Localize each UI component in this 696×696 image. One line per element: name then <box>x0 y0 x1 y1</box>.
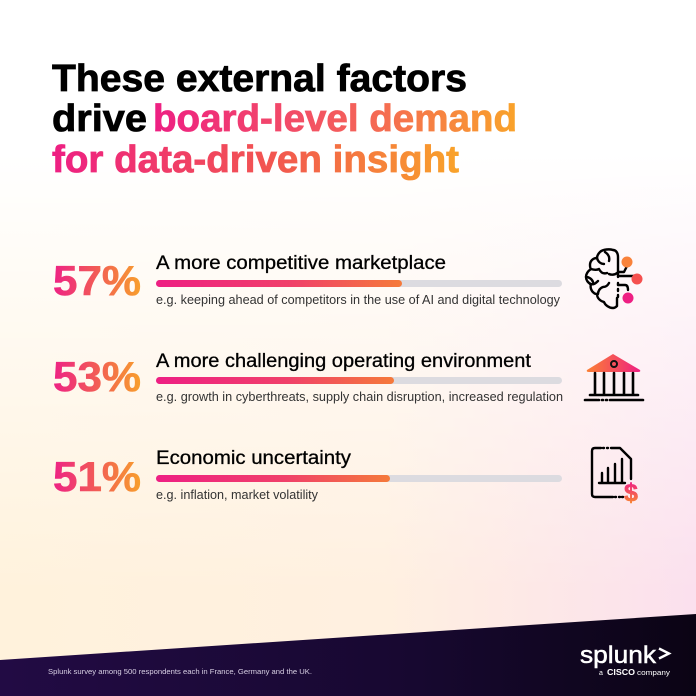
stat 51%: 51% <box>53 453 141 500</box>
icon: bank building <box>585 354 643 400</box>
icon nodes <box>622 256 642 304</box>
heading: A more challenging operating environment <box>156 351 532 372</box>
row: challenging operating environment <box>53 351 643 404</box>
progress bar 51% <box>156 475 562 482</box>
logo: splunk a cisco company: CISCO <box>607 668 635 677</box>
footnote: Splunk survey among 500 respondents each in France, Germany and the UK. <box>48 667 312 676</box>
logo: splunk a cisco company <box>580 642 671 677</box>
logo: splunk a cisco company: a <box>599 670 603 677</box>
footer band <box>0 614 696 696</box>
title <box>52 58 517 181</box>
title: These external factors <box>52 58 467 100</box>
title: board-level demand <box>153 98 517 140</box>
title: for data-driven insight <box>52 139 459 181</box>
icon: document chart <box>592 448 631 497</box>
row: competitive marketplace <box>53 249 642 308</box>
example text: e.g. inflation, market volatility <box>156 488 319 502</box>
icon: dollar sign: $ <box>624 479 638 507</box>
heading: Economic uncertainty <box>156 448 352 469</box>
example text: e.g. keeping ahead of competitors in the use of AI and digital technology <box>156 293 561 307</box>
logo: splunk a cisco company: company <box>637 670 671 677</box>
icon: brain network <box>586 249 636 308</box>
example text: e.g. growth in cyberthreats, supply chain disruption, increased regulation <box>156 390 563 404</box>
progress bar 57% <box>156 280 562 287</box>
logo: splunk a cisco company: splunk <box>580 642 657 669</box>
progress bar 53% <box>156 377 562 384</box>
stat 57%: 57% <box>53 257 141 304</box>
title: drive <box>52 98 147 140</box>
row: economic uncertainty <box>53 448 638 507</box>
stat 53%: 53% <box>53 353 141 400</box>
heading: A more competitive marketplace <box>156 253 446 274</box>
